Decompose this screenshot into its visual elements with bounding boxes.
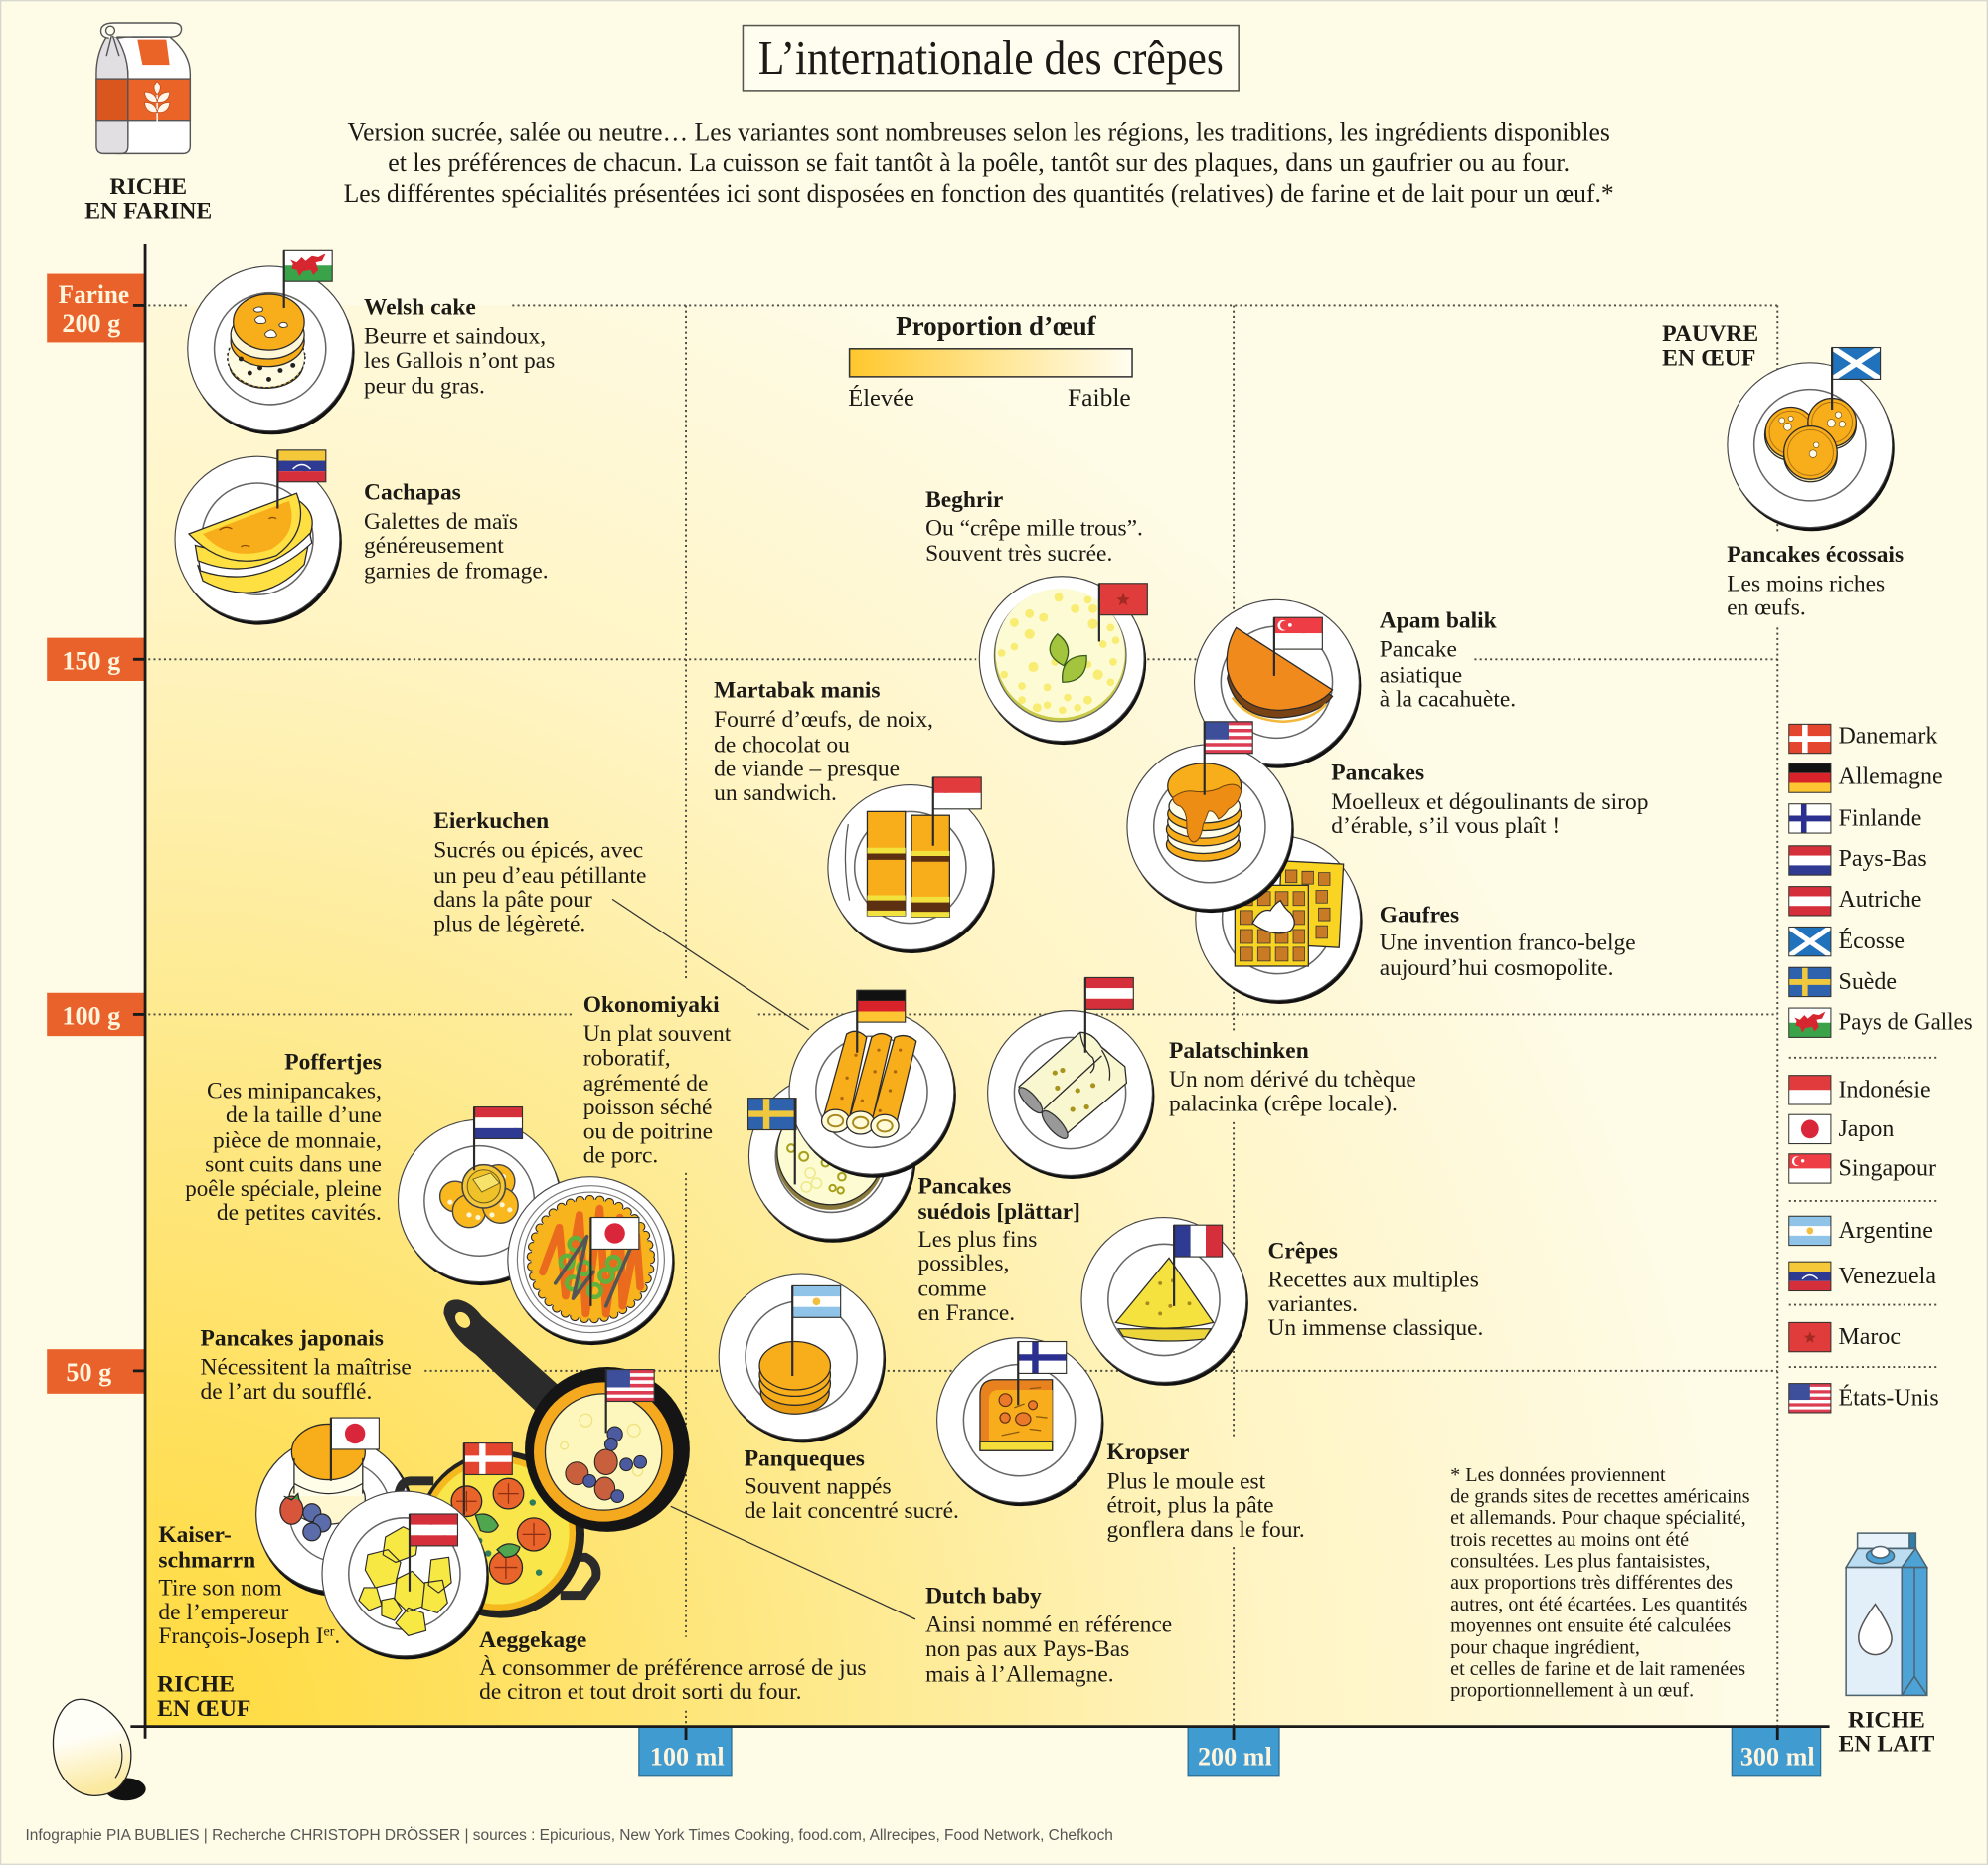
label: riche en farine: EN FARINE (84, 198, 212, 224)
label: riche en oeuf: RICHE (157, 1672, 235, 1698)
text: Aeggekage: Aeggekage (479, 1627, 586, 1653)
y axis ticks: 200 g (62, 309, 120, 338)
legend: country flags: Venezuela (1838, 1264, 1936, 1289)
text: Pancakes écossais: en œufs. (1727, 595, 1806, 621)
text: Okonomiyaki: Okonomiyaki (583, 992, 720, 1018)
text: Kaiserschmarrn: François-Joseph I (158, 1623, 340, 1649)
x axis ticks: 100 ml (650, 1743, 725, 1772)
text: Kaiserschmarrn: schmarrn (158, 1548, 255, 1574)
text: Kaiserschmarrn: er (324, 1623, 335, 1639)
dish: Eierkuchen (789, 990, 956, 1178)
legend: country flags: Autriche (1838, 887, 1921, 913)
y axis ticks: 50 g (66, 1358, 111, 1387)
text: Kaiserschmarrn: . (334, 1623, 340, 1649)
text: Eierkuchen: un peu d’eau pétillante (433, 863, 646, 889)
legend: country flags: Pays-Bas (1838, 846, 1927, 872)
y axis ticks (47, 274, 144, 1394)
text: Kropser: étroit, plus la pâte (1107, 1493, 1274, 1519)
text: Pancakes japonais: Pancakes japonais (201, 1325, 384, 1351)
intro text: et les préférences de chacun. La cuisson se fait tantôt à la poêle, tantôt sur des plaques, dans un gaufrier ou au four. (388, 148, 1570, 177)
label: pauvre en oeuf: PAUVRE (1662, 321, 1758, 347)
dish: Cachapas (175, 450, 342, 625)
text: Kropser: gonflera dans le four. (1107, 1517, 1305, 1543)
legend: country flags: Suède (1838, 969, 1897, 995)
dish: Aeggekage (399, 1443, 596, 1618)
leader line: Dutch baby (671, 1506, 915, 1619)
plot area gradient (146, 305, 1777, 1727)
text: Kropser: Kropser (1107, 1440, 1189, 1465)
text: Pancakes suédois: Les plus fins (917, 1227, 1037, 1253)
legend: country flags: États-Unis (1838, 1385, 1939, 1411)
text: Martabak manis: de chocolat ou (714, 732, 850, 758)
dish: Pancakes (1127, 722, 1294, 913)
text: Welsh cake: Welsh cake (364, 294, 476, 320)
y axis ticks: 150 g (62, 647, 120, 676)
legend: country flags: Argentine (1838, 1218, 1933, 1244)
y axis ticks: Farine (59, 280, 129, 309)
legend: proportion d'oeuf: Faible (1068, 383, 1131, 412)
text: Crêpes: Crêpes (1268, 1238, 1338, 1264)
text: Panqueques: de lait concentré sucré. (745, 1498, 959, 1524)
dish: Pancakes écossais (1728, 348, 1895, 531)
text: Martabak manis: Fourré d’œufs, de noix, (714, 707, 933, 733)
text: Okonomiyaki: poisson séché (583, 1095, 712, 1120)
text: Poffertjes: de la taille d’une (226, 1102, 382, 1128)
text: Kaiserschmarrn: Kaiser- (158, 1522, 232, 1548)
dish: Apam balik (1195, 599, 1361, 768)
text: Pancakes suédois: possibles, (917, 1251, 1009, 1276)
credits: Infographie PIA BUBLIES | Recherche CHRISTOPH DRÖSSER | sources : Epicurious, New York Times Cooking, food.com, Allrecipes, Food Network, Chefkoch (26, 1826, 1113, 1844)
y axis ticks: 100 g (62, 1002, 120, 1031)
legend: country flags: Allemagne (1838, 763, 1943, 789)
text: Pancakes écossais: Les moins riches (1727, 571, 1885, 596)
text: Crêpes: Un immense classique. (1268, 1315, 1483, 1341)
text: Poffertjes: pièce de monnaie, (213, 1127, 382, 1153)
text: Gaufres: Une invention franco-belge (1380, 930, 1636, 955)
text: Pancakes suédois: comme (917, 1276, 987, 1302)
text: Poffertjes: Ces minipancakes, (207, 1079, 382, 1104)
text: Welsh cake: les Gallois n’ont pas (364, 348, 555, 374)
text: Pancakes japonais: Nécessitent la maîtrise (201, 1355, 412, 1381)
text: Kaiserschmarrn: de l’empereur (158, 1600, 288, 1625)
x axis ticks: 300 ml (1740, 1743, 1815, 1772)
dish: Gaufres (1196, 836, 1363, 1004)
text: Apam balik: Pancake (1380, 637, 1457, 663)
text: Eierkuchen: plus de légèreté. (433, 911, 585, 936)
text: Pancakes: d’érable, s’il vous plaît ! (1331, 813, 1560, 839)
text: Eierkuchen: Eierkuchen (433, 808, 549, 834)
text: Beghrir: Beghrir (925, 487, 1003, 513)
text: Dutch baby: Ainsi nommé en référence (925, 1612, 1172, 1638)
text: Welsh cake: Beurre et saindoux, (364, 324, 546, 350)
text: Pancakes suédois: en France. (917, 1300, 1015, 1326)
footnote: aux proportions très différentes des (1450, 1572, 1733, 1594)
legend: country flags: Indonésie (1838, 1077, 1931, 1102)
text: Okonomiyaki: de porc. (583, 1143, 658, 1169)
text: Gaufres: aujourd’hui cosmopolite. (1380, 955, 1614, 981)
text: Apam balik: asiatique (1380, 662, 1462, 688)
legend: country flags: Singapour (1838, 1155, 1936, 1181)
dish: Palatschinken (988, 977, 1154, 1179)
label: pauvre en oeuf: EN ŒUF (1662, 345, 1755, 371)
text: Poffertjes: sont cuits dans une (205, 1152, 382, 1178)
text: Palatschinken: Un nom dérivé du tchèque (1169, 1067, 1416, 1093)
text: Okonomiyaki: roboratif, (583, 1045, 671, 1071)
footnote: moyennes ont ensuite été calculées (1450, 1615, 1731, 1637)
legend: country flags: Pays de Galles (1838, 1010, 1973, 1036)
text: Pancakes japonais: de l’art du soufflé. (201, 1379, 372, 1405)
text: Pancakes suédois: suédois [plättar] (917, 1199, 1080, 1225)
legend: country flags: Danemark (1838, 723, 1937, 749)
legend: country flags: Finlande (1838, 805, 1921, 831)
text: Martabak manis: de viande – presque (714, 757, 900, 782)
dish: Panqueques (719, 1274, 886, 1442)
footnote: et allemands. Pour chaque spécialité, (1450, 1507, 1746, 1529)
text: Cachapas: Galettes de maïs (364, 509, 518, 535)
footnote: autres, ont été écartées. Les quantités (1450, 1594, 1748, 1615)
label: riche en oeuf: EN ŒUF (157, 1696, 250, 1722)
flag: Suède (748, 1099, 796, 1184)
text: Pancakes suédois: Pancakes (917, 1173, 1011, 1199)
text: Kaiserschmarrn: Tire son nom (158, 1576, 282, 1602)
legend: country flags: Japon (1838, 1116, 1894, 1142)
text: Dutch baby: Dutch baby (925, 1583, 1042, 1609)
text: Dutch baby: mais à l’Allemagne. (925, 1661, 1114, 1687)
dish: Beghrir (979, 577, 1147, 745)
text: Crêpes: Recettes aux multiples (1268, 1268, 1479, 1293)
intro text: Les différentes spécialités présentées ici sont disposées en fonction des quantités (relatives) de farine et de lait pour un œuf.* (344, 179, 1614, 208)
text: Gaufres: Gaufres (1380, 902, 1459, 928)
footnote: pour chaque ingrédient, (1450, 1636, 1640, 1658)
label: riche en lait: EN LAIT (1839, 1732, 1935, 1758)
legend: country flags (1789, 723, 1973, 1413)
text: Aeggekage: À consommer de préférence arrosé de jus (479, 1655, 867, 1681)
dish: Okonomiyaki (508, 1177, 675, 1345)
text: Dutch baby: non pas aux Pays-Bas (925, 1636, 1129, 1662)
axes (130, 244, 1830, 1740)
icon: flour bag (96, 23, 190, 153)
footnote: et celles de farine et de lait ramenées (1450, 1658, 1745, 1680)
label: riche en lait: RICHE (1848, 1707, 1925, 1733)
dish: Martabak manis (828, 777, 995, 953)
dish: Pancakes suédois (748, 1074, 915, 1243)
legend: proportion d'oeuf: Élevée (848, 384, 914, 412)
text: Poffertjes: Poffertjes (284, 1049, 382, 1075)
text: Cachapas: Cachapas (364, 480, 461, 506)
text: Okonomiyaki: agrémenté de (583, 1071, 708, 1097)
dish: Crêpes (1081, 1218, 1248, 1386)
text: Apam balik: à la cacahuète. (1380, 686, 1516, 712)
text: Okonomiyaki: Un plat souvent (583, 1021, 732, 1047)
title: L’internationale des crêpes (758, 32, 1224, 85)
footnote: trois recettes au moins ont été (1450, 1529, 1689, 1551)
dish: Dutch baby (443, 1299, 690, 1532)
text: Panqueques: Souvent nappés (745, 1474, 892, 1500)
dish: Kropser (937, 1338, 1103, 1506)
legend: country flags: Écosse (1838, 929, 1905, 954)
text: Kropser: Plus le moule est (1107, 1468, 1266, 1494)
text: Okonomiyaki: ou de poitrine (583, 1118, 713, 1144)
label: riche en farine: RICHE (109, 174, 187, 200)
text: Panqueques: Panqueques (745, 1446, 865, 1472)
icon: egg (53, 1699, 146, 1800)
text: Martabak manis: Martabak manis (714, 678, 881, 704)
text: Eierkuchen: Sucrés ou épicés, avec (433, 837, 643, 863)
x axis ticks: 200 ml (1198, 1743, 1272, 1772)
footnote: proportionnellement à un œuf. (1450, 1680, 1694, 1702)
text: Apam balik: Apam balik (1380, 607, 1498, 633)
dish: Kaiserschmarrn (322, 1491, 489, 1659)
text: Welsh cake: peur du gras. (364, 373, 485, 399)
text: Cachapas: garnies de fromage. (364, 559, 549, 585)
legend: proportion d'oeuf (848, 311, 1132, 412)
footnote: de grands sites de recettes américains (1450, 1486, 1750, 1508)
icon: milk carton (1846, 1533, 1927, 1695)
intro text: Version sucrée, salée ou neutre… Les variantes sont nombreuses selon les régions, les traditions, les ingrédients disponibles (347, 118, 1610, 147)
text: Eierkuchen: dans la pâte pour (433, 887, 592, 913)
text: Cachapas: généreusement (364, 533, 504, 559)
x axis ticks (639, 1727, 1821, 1776)
dish: Welsh cake (188, 250, 355, 434)
text: Poffertjes: de petites cavités. (217, 1200, 382, 1226)
text: Crêpes: variantes. (1268, 1291, 1358, 1317)
text: Pancakes: Moelleux et dégoulinants de sirop (1331, 789, 1648, 815)
text: Pancakes écossais: Pancakes écossais (1727, 542, 1904, 568)
text: Poffertjes: poêle spéciale, pleine (185, 1176, 382, 1202)
text: Martabak manis: un sandwich. (714, 780, 837, 806)
text: Aeggekage: de citron et tout droit sorti du four. (479, 1679, 802, 1705)
text: Beghrir: Souvent très sucrée. (925, 541, 1112, 567)
legend: country flags: Maroc (1838, 1324, 1901, 1350)
dish: Pancakes japonais (256, 1418, 414, 1597)
text: Beghrir: Ou “crêpe mille trous”. (925, 515, 1143, 541)
legend: proportion d'oeuf: Proportion d’œuf (896, 311, 1097, 341)
footnote: consultées. Les plus fantaisistes, (1450, 1551, 1710, 1573)
dish: Poffertjes (398, 1107, 563, 1285)
text: Pancakes: Pancakes (1331, 760, 1424, 785)
text: Palatschinken: Palatschinken (1169, 1038, 1309, 1064)
leader line: Eierkuchen (612, 899, 809, 1030)
footnote: * Les données proviennent (1450, 1464, 1666, 1486)
text: Palatschinken: palacinka (crêpe locale). (1169, 1091, 1398, 1116)
